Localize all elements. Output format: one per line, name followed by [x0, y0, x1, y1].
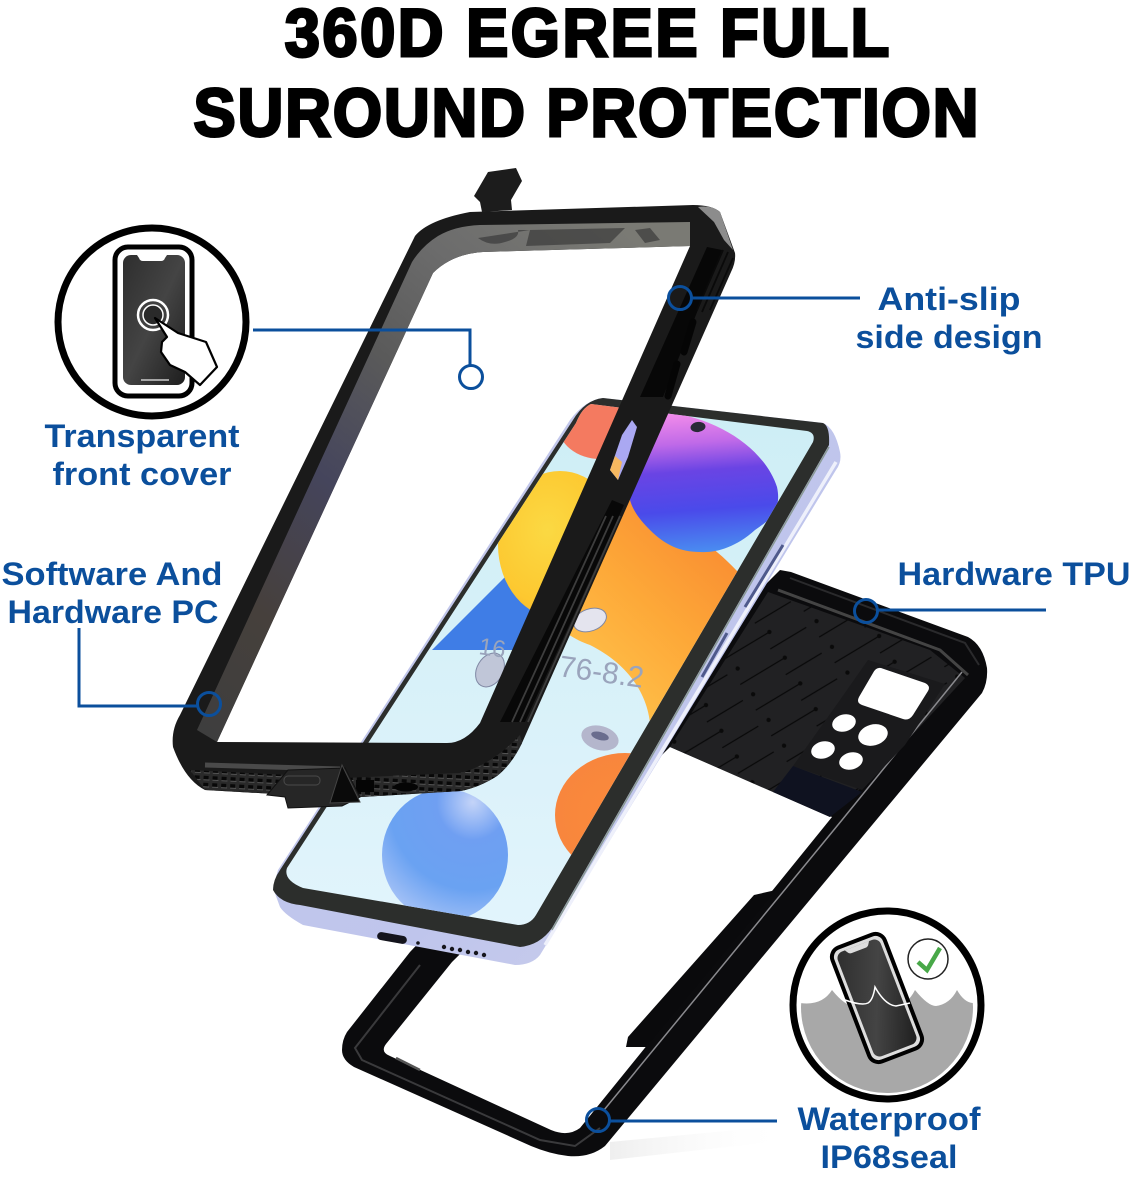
phone tilted — [829, 931, 925, 1065]
wallpaper: 76-8.2 — [557, 650, 646, 695]
label: transparent front cover: front cover — [52, 456, 232, 492]
icon: waterproof — [793, 911, 981, 1100]
bottom tab — [267, 768, 360, 808]
port — [394, 782, 418, 792]
callout: anti-slip — [668, 286, 860, 310]
label: software and hardware pc: Hardware PC — [8, 594, 218, 630]
title — [194, 0, 978, 150]
callout: waterproof — [586, 1108, 777, 1132]
translucent inner band — [197, 222, 690, 742]
volume key through notch — [610, 420, 637, 480]
hand — [155, 318, 217, 385]
label: anti-slip side design: side design — [856, 319, 1042, 355]
floor shadow — [610, 1125, 790, 1160]
front frame — [173, 168, 735, 808]
callout: transparent cover — [253, 330, 482, 388]
bottom ports — [377, 931, 407, 945]
back case — [342, 570, 987, 1156]
label: anti-slip side design — [856, 281, 1042, 355]
camera module — [773, 660, 945, 817]
water — [801, 990, 973, 1093]
lower gloss strip — [205, 765, 340, 769]
title: SUROUND PROTECTION — [194, 75, 978, 150]
phone — [270, 391, 840, 965]
rim highlight — [604, 672, 962, 1110]
black strips — [640, 247, 722, 397]
callout: hardware tpu — [854, 600, 1046, 622]
metal highlight — [545, 462, 836, 945]
label: anti-slip side design: Anti-slip — [878, 281, 1020, 317]
top corner highlight — [698, 207, 733, 250]
rim ridge — [778, 590, 968, 675]
textured back panel — [670, 592, 965, 817]
checkmark badge — [908, 939, 948, 979]
label: hardware tpu: Hardware TPU — [898, 556, 1130, 592]
label: software and hardware pc: Software And — [2, 556, 222, 592]
label: waterproof ip68 seal: Waterproof — [798, 1101, 981, 1137]
ribs lower — [512, 516, 620, 722]
wallpaper — [286, 404, 814, 925]
ribs upper — [697, 250, 733, 312]
icon: touch screen — [58, 228, 246, 416]
textured lower edge — [190, 735, 522, 798]
clock text: 16 — [477, 633, 507, 664]
callout: hardware pc — [79, 628, 220, 716]
molded details — [478, 228, 660, 246]
frame rim — [173, 205, 735, 798]
label: waterproof ip68 seal — [798, 1101, 981, 1175]
label: transparent front cover: Transparent — [44, 418, 240, 454]
label: software and hardware pc — [2, 556, 222, 630]
front camera — [690, 421, 706, 433]
top tab — [474, 168, 522, 212]
label: transparent front cover — [44, 418, 240, 492]
side buttons — [668, 322, 693, 396]
callout lines and markers — [79, 286, 1046, 1132]
label: waterproof ip68 seal: IP68seal — [820, 1139, 958, 1175]
side buttons — [745, 545, 783, 607]
thick flange — [626, 890, 776, 1047]
phone bezel — [273, 398, 829, 947]
phone body — [273, 398, 840, 965]
